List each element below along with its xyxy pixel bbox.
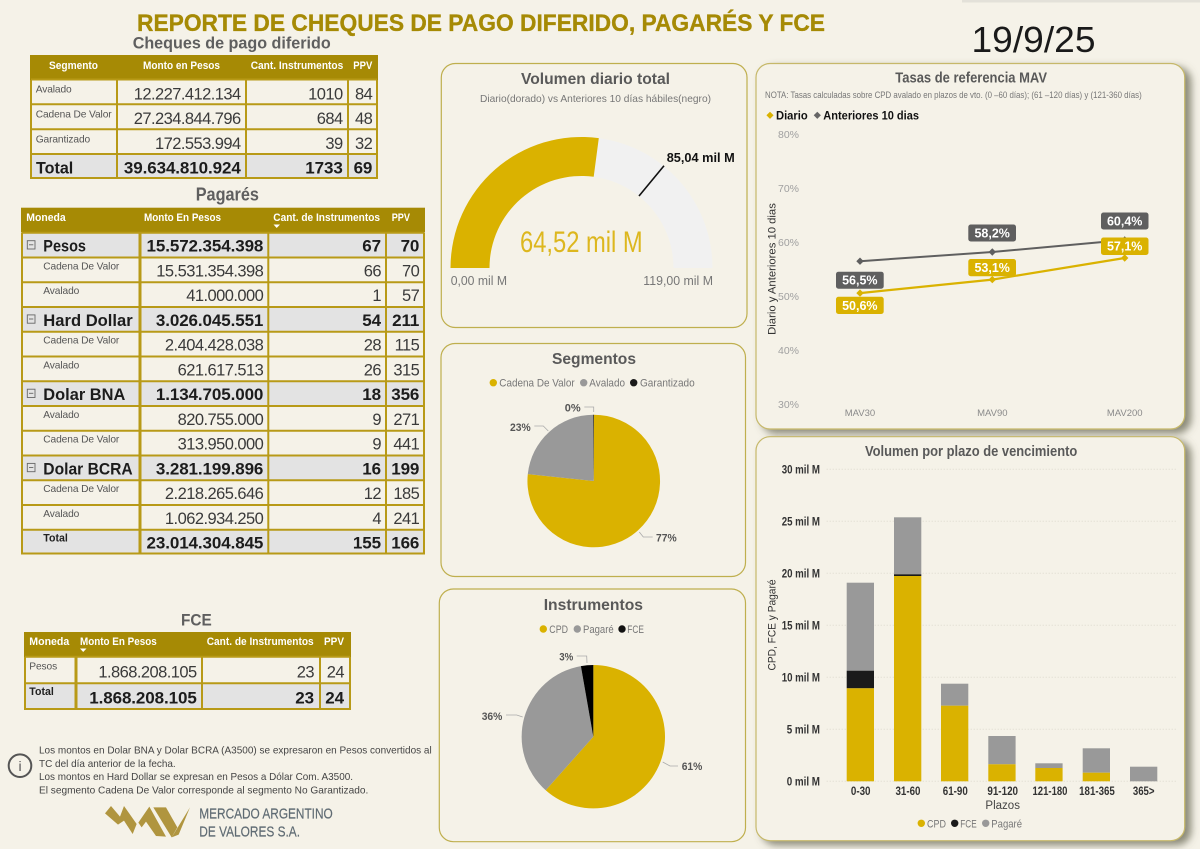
stacked bars	[847, 517, 1157, 781]
legend: Diario	[776, 108, 808, 122]
x axis: 121-180	[1032, 786, 1068, 798]
row: Avalado: 84	[355, 85, 373, 103]
row: Pesos	[29, 661, 344, 682]
gauge target value: 85,04 mil M	[667, 150, 735, 165]
y axis	[778, 129, 799, 411]
data label: 50,6%	[836, 297, 884, 314]
group row: Pesos: 15.572.354.398	[147, 237, 263, 256]
row: Cadena De Valor: 313.950.000	[178, 436, 264, 454]
row: Cadena De Valor: 28	[364, 337, 381, 355]
row: Total: 1733	[305, 158, 343, 177]
bar: 121-180	[1035, 763, 1063, 781]
legend	[540, 624, 644, 636]
table header: Moneda	[29, 636, 70, 648]
logo mark	[105, 806, 190, 837]
row: Pesos: 23	[297, 664, 314, 682]
data label: 50,6%: 50,6%	[842, 299, 878, 313]
x axis: MAV30	[845, 408, 875, 419]
bar: 0-30	[847, 583, 874, 781]
row: Cadena De Valor: 66	[364, 262, 381, 280]
row: Avalado: 241	[393, 510, 420, 528]
row: Avalado: 1.062.934.250	[165, 510, 264, 528]
table header: PPV	[392, 212, 411, 224]
x axis	[845, 408, 1143, 419]
footnotes: El segmento Cadena De Valor corresponde al segmento No Garantizado.	[39, 784, 368, 796]
row: Avalado: Avalado	[43, 509, 80, 520]
row: Cadena De Valor: 48	[355, 110, 373, 128]
group row: Hard Dollar: 54	[362, 311, 382, 330]
y axis: 20 mil M	[782, 568, 820, 580]
row: Avalado: 820.755.000	[178, 411, 264, 429]
y axis: 50%	[778, 291, 799, 303]
panel heading: Segmentos	[552, 351, 636, 368]
group row: Dolar BCRA: Dolar BCRA	[43, 460, 133, 478]
table header: Cant. de Instrumentos	[273, 212, 380, 224]
row: Cadena De Valor: 185	[393, 485, 420, 503]
row: Avalado	[43, 360, 420, 380]
x axis: 61-90	[943, 786, 968, 798]
y axis: 10 mil M	[782, 672, 820, 684]
heading: FCE: FCE	[181, 611, 212, 630]
line: diario	[856, 254, 1128, 297]
x axis: MAV90	[977, 408, 1008, 419]
heading: cheques de pago diferido: Cheques de pago diferido	[133, 33, 331, 52]
title: REPORTE DE CHEQUES DE PAGO DIFERIDO, PAGARÉS Y FCE	[137, 9, 825, 37]
row: Total: 23.014.304.845	[147, 534, 263, 553]
panel: volumen diario total	[441, 64, 747, 328]
label: 77%: 77%	[656, 533, 677, 545]
gauge value: 64,52 mil M	[520, 226, 643, 259]
row: Cadena De Valor: 15.531.354.398	[156, 262, 264, 280]
row: Cadena De Valor	[43, 484, 420, 503]
row: Cadena De Valor: Cadena De Valor	[43, 336, 120, 347]
table header: Segmento	[49, 60, 98, 72]
row: Garantizado	[36, 134, 373, 153]
data label: 56,5%: 56,5%	[842, 274, 878, 288]
gauge maximum: 119,00 mil M	[643, 274, 713, 288]
table: pagarés	[21, 208, 425, 554]
row: Avalado	[43, 509, 420, 528]
legend: Pagaré	[991, 818, 1022, 830]
icon: info: i	[18, 758, 22, 774]
row: Total: 1.868.208.105	[89, 688, 197, 707]
table header	[30, 55, 378, 80]
y axis: 70%	[778, 183, 799, 195]
group row: Pesos: 70	[401, 237, 419, 256]
panel: instrumentos	[439, 589, 746, 842]
panel: segmentos	[441, 344, 746, 576]
row: Total: 69	[354, 158, 372, 177]
legend: FCE	[627, 624, 644, 636]
panel: tasas de referencia MAV	[756, 64, 1185, 429]
legend: Avalado	[589, 378, 625, 390]
y axis: 30 mil M	[782, 464, 820, 476]
label: 3%: 3%	[559, 652, 573, 664]
panel heading: Volumen diario total	[521, 71, 670, 88]
row: Avalado	[36, 84, 373, 103]
group row: Dolar BNA: 18	[362, 385, 381, 404]
row: Avalado: 1010	[308, 85, 343, 103]
group row: Dolar BCRA: 199	[391, 460, 419, 478]
legend: Anteriores 10 dias	[823, 108, 919, 122]
date: 19/9/25	[972, 19, 1096, 60]
row: Cadena De Valor	[43, 262, 420, 280]
table header: Cant. de Instrumentos	[207, 636, 314, 648]
data label: 57,1%	[1101, 238, 1148, 255]
y axis: 5 mil M	[787, 724, 820, 736]
x axis: 91-120	[987, 786, 1018, 798]
table header: Monto en Pesos	[143, 60, 220, 72]
row: Garantizado: 39	[325, 135, 343, 153]
row: Cadena De Valor: Cadena De Valor	[43, 484, 120, 495]
row: Garantizado: 172.553.994	[155, 135, 241, 153]
subtitle: Diario(dorado) vs Anteriores 10 días hábiles(negro)	[480, 93, 711, 105]
table: cheques de pago diferido	[30, 55, 378, 179]
footnotes: Los montos en Hard Dollar se expresan en Pesos a Dólar Com. A3500.	[39, 771, 353, 783]
x axis: 0-30	[851, 786, 871, 798]
table header	[21, 208, 425, 233]
group row: Dolar BCRA	[21, 455, 425, 480]
table header	[24, 632, 351, 657]
row: Cadena De Valor: 9	[372, 436, 381, 454]
table header: Monto En Pesos	[144, 212, 221, 224]
bar: 61-90	[941, 684, 968, 781]
row: Avalado: 1	[372, 287, 381, 305]
x axis: MAV200	[1107, 408, 1143, 419]
row: Total: 24	[325, 688, 345, 707]
legend: Pagaré	[583, 624, 614, 636]
legend	[490, 378, 695, 390]
y axis: 15 mil M	[782, 620, 820, 632]
group row: Dolar BNA: Dolar BNA	[43, 386, 125, 404]
data label: 53,1%: 53,1%	[974, 261, 1010, 275]
group row: Dolar BCRA: 16	[362, 460, 381, 478]
row: Avalado: Avalado	[43, 286, 80, 297]
row: Cadena De Valor: 115	[395, 337, 420, 355]
label: 0%: 0%	[565, 402, 581, 414]
row: Avalado	[43, 286, 420, 305]
row: Avalado: 26	[364, 362, 381, 380]
table header: Moneda	[26, 212, 67, 224]
table header: PPV	[353, 60, 373, 72]
data label: 60,4%: 60,4%	[1107, 214, 1142, 228]
row: Pesos: 1.868.208.105	[98, 664, 197, 682]
row: Cadena De Valor: 12	[364, 485, 381, 503]
bar: 31-60	[894, 517, 921, 781]
row: Avalado: 271	[393, 411, 420, 429]
row: Cadena De Valor	[43, 435, 420, 454]
legend	[918, 818, 1022, 830]
label: 36%: 36%	[482, 711, 503, 723]
data label: 53,1%	[968, 259, 1016, 276]
logo text: MERCADO ARGENTINO	[199, 805, 333, 822]
group row: Dolar BNA: 1.134.705.000	[156, 385, 263, 404]
table: FCE	[24, 632, 351, 710]
footnotes: Los montos en Dolar BNA y Dolar BCRA (A3500) se expresaron en Pesos convertidos al	[39, 745, 432, 757]
y axis: 80%	[778, 129, 799, 141]
legend: CPD	[927, 818, 946, 830]
group row: Hard Dollar: 3.026.045.551	[156, 311, 263, 330]
group row: Dolar BCRA: 3.281.199.896	[156, 460, 263, 478]
x axis title: Plazos	[985, 800, 1020, 812]
y axis: 40%	[778, 345, 799, 357]
legend: Cadena De Valor	[499, 378, 575, 390]
heading: pagarés: Pagarés	[196, 185, 259, 205]
group row: Pesos	[21, 233, 425, 257]
row: Avalado: 41.000.000	[186, 287, 264, 305]
label: 23%: 23%	[510, 422, 531, 434]
row: Cadena De Valor: 441	[393, 436, 420, 454]
group row: Dolar BNA	[21, 381, 425, 406]
row: Garantizado: Garantizado	[36, 134, 91, 145]
table header: PPV	[324, 636, 345, 648]
y axis: 25 mil M	[782, 516, 820, 528]
legend: FCE	[960, 818, 977, 830]
row: Cadena De Valor	[36, 109, 373, 128]
row: Avalado: 621.617.513	[178, 362, 264, 380]
row: Total: 23	[295, 688, 314, 707]
legend	[766, 108, 919, 122]
note: NOTA: Tasas calculadas sobre CPD avalado en plazos de vto. (0 –60 días); (61 –120 días) y (121-360 días)	[765, 90, 1142, 100]
data label: 56,5%	[836, 272, 884, 289]
logo text: DE VALORES S.A.	[199, 824, 300, 841]
data label: 58,2%: 58,2%	[974, 226, 1010, 240]
y axis: 0 mil M	[787, 776, 820, 788]
legend: Garantizado	[640, 378, 695, 390]
legend: CPD	[549, 624, 568, 636]
y axis: 60%	[778, 237, 799, 249]
row: Cadena De Valor: 684	[317, 110, 343, 128]
row: Total: Total	[29, 686, 54, 698]
logo text	[199, 805, 333, 841]
icon: info	[9, 754, 31, 777]
row: Avalado: 315	[393, 362, 420, 380]
panel: volumen por plazo de vencimiento	[756, 437, 1185, 841]
row: Total: Total	[36, 159, 73, 177]
y axis title: CPD, FCE y Pagaré	[766, 580, 778, 670]
panel heading: Tasas de referencia MAV	[895, 70, 1047, 86]
pie chart	[506, 656, 678, 808]
row: Avalado: Avalado	[43, 410, 80, 421]
x axis: 31-60	[896, 786, 920, 798]
row: Total: 155	[353, 534, 381, 553]
data label: 57,1%: 57,1%	[1107, 240, 1142, 254]
group row: Dolar BNA: 356	[391, 385, 419, 404]
row: Avalado: Avalado	[36, 84, 72, 96]
row: Cadena De Valor: Cadena De Valor	[36, 109, 112, 120]
footnotes	[39, 745, 432, 796]
row: Total: Total	[43, 533, 68, 545]
y axis title: Diario y Anteriores 10 dias	[766, 203, 778, 335]
row: Avalado: 4	[372, 510, 381, 528]
row: Avalado: 9	[372, 411, 381, 429]
logo: Mercado Argentino de Valores	[105, 805, 333, 841]
row: Cadena De Valor: 2.404.428.038	[165, 337, 264, 355]
y axis: 30%	[778, 399, 799, 411]
row: Cadena De Valor: 27.234.844.796	[134, 110, 241, 128]
group row: Hard Dollar: Hard Dollar	[43, 312, 133, 330]
x axis	[851, 786, 1155, 798]
row: Avalado: Avalado	[43, 360, 80, 372]
row: Cadena De Valor: Cadena De Valor	[43, 262, 120, 272]
row: Garantizado: 32	[355, 135, 373, 153]
table header: Cant. Instrumentos	[251, 60, 343, 72]
row: Total: 166	[391, 534, 419, 553]
row: Pesos: Pesos	[29, 661, 57, 672]
data label: 60,4%	[1101, 212, 1148, 230]
panel heading: Volumen por plazo de vencimiento	[865, 443, 1077, 460]
group row: Pesos: 67	[362, 237, 381, 256]
data label: 58,2%	[968, 224, 1016, 242]
gauge minimum: 0,00 mil M	[451, 274, 507, 288]
row: Total: 39.634.810.924	[124, 158, 241, 177]
row: Cadena De Valor	[43, 336, 420, 355]
group row: Hard Dollar: 211	[392, 311, 419, 330]
line: anteriores 10 dias	[856, 236, 1128, 265]
row: Avalado	[43, 410, 420, 429]
row: Cadena De Valor: Cadena De Valor	[43, 435, 120, 446]
group row: Pesos: Pesos	[43, 238, 86, 256]
x axis: 181-365	[1079, 786, 1115, 798]
row: Total	[30, 154, 378, 179]
y axis	[782, 464, 820, 788]
bar: 181-365	[1083, 748, 1110, 781]
footnotes: TC del día anterior de la fecha.	[39, 758, 176, 770]
gauge chart	[450, 137, 712, 268]
panel heading: Instrumentos	[544, 597, 643, 614]
group row: Hard Dollar	[21, 307, 425, 332]
label: 61%: 61%	[682, 761, 703, 773]
bar: 91-120	[988, 736, 1016, 781]
bar: 365>	[1130, 767, 1157, 781]
row: Total	[24, 683, 351, 710]
row: Pesos: 24	[327, 664, 344, 682]
table header: Monto En Pesos	[80, 636, 157, 648]
row: Total	[21, 530, 425, 554]
row: Avalado: 57	[402, 287, 420, 305]
row: Cadena De Valor: 70	[402, 262, 420, 280]
pie chart	[527, 407, 660, 547]
x axis: 365>	[1133, 786, 1155, 798]
row: Cadena De Valor: 2.218.265.646	[165, 485, 264, 503]
row: Avalado: 12.227.412.134	[134, 85, 241, 103]
